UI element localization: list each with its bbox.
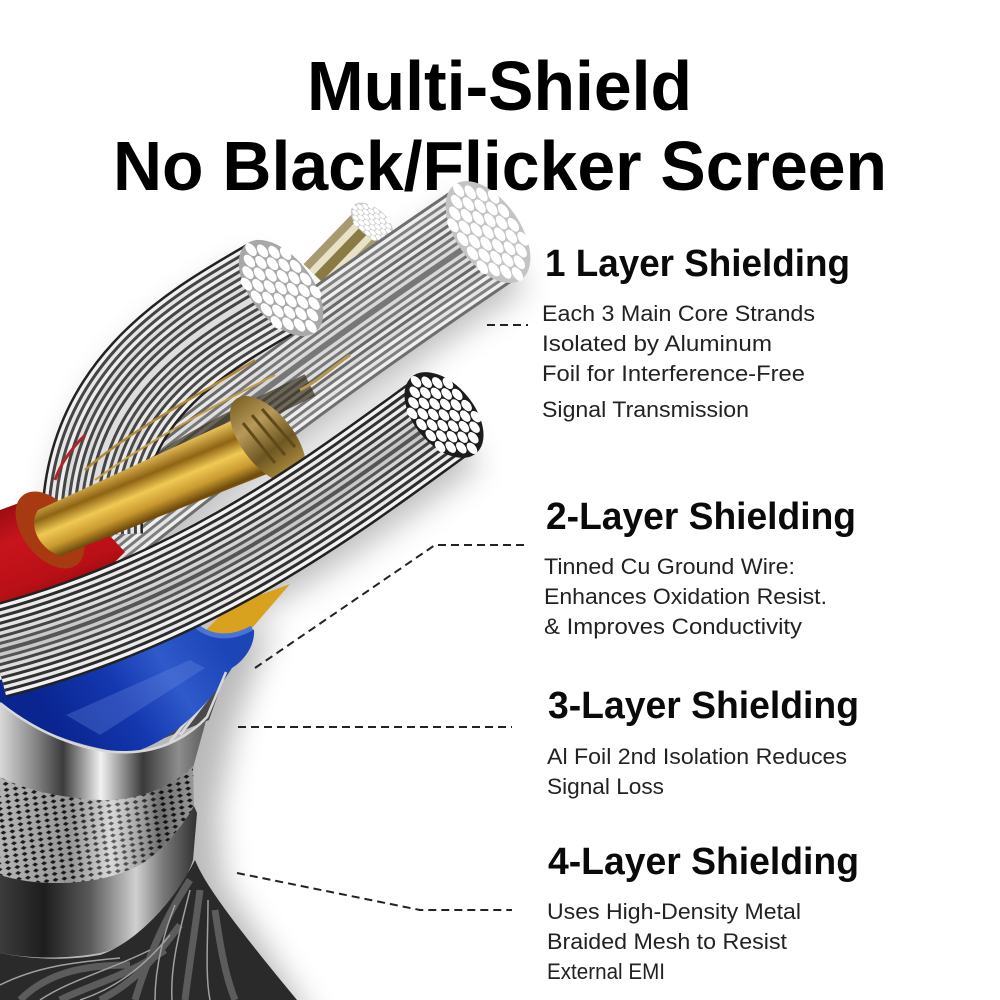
title [113,47,887,205]
section: 1 layer shielding: Isolated by Aluminum [542,331,772,356]
section: 3-layer shielding: Signal Loss [547,774,664,799]
inner strand mass behind bundles [50,330,350,570]
section: 4-layer shielding: Uses High-Density Metal [547,899,801,924]
dark core gap and gold tint strands [55,355,350,490]
blue insulated wire [0,625,254,752]
section: 2-layer shielding [544,496,856,639]
strand end: top right [429,166,547,298]
callout lines [237,325,528,910]
section: 4-layer shielding: External EMI [547,959,665,984]
strand bundle: top right [60,232,488,550]
section: 1 layer shielding [542,243,850,422]
soft drop shadow [3,244,496,1000]
section: 4-layer shielding: 4-Layer Shielding [548,841,859,883]
section: 4-layer shielding [547,841,859,984]
section: 2-layer shielding: Enhances Oxidation Resist. [544,584,827,609]
inner foil behind blue wire [100,650,226,752]
strand bundle: lower [0,415,444,652]
section: 4-layer shielding: Braided Mesh to Resist [547,929,787,954]
second metal sleeve [0,806,197,958]
section: 1 layer shielding: 1 Layer Shielding [545,243,850,285]
section: 2-layer shielding: Tinned Cu Ground Wire: [544,554,795,579]
red insulated wire [0,479,125,622]
foil rim highlight [0,672,226,752]
outer black braid [0,860,297,1000]
strand end: top left [222,225,340,351]
small back strand [318,195,400,278]
title: Multi-Shield [307,47,692,125]
lower gold conductor [196,584,290,642]
title: No Black/Flicker Screen [113,127,887,205]
section: 2-layer shielding: 2-Layer Shielding [546,496,856,538]
section: 1 layer shielding: Each 3 Main Core Strands [542,301,815,326]
metal foil layer tube [0,703,207,800]
cable illustration [0,166,547,1000]
section: 2-layer shielding: & Improves Conductivity [544,614,802,639]
braided mesh layer [0,766,194,883]
strand bundle: top left [92,288,272,535]
gold conductor [34,383,321,556]
section: 3-layer shielding: Al Foil 2nd Isolation Reduces [547,744,847,769]
section: 1 layer shielding: Signal Transmission [542,397,749,422]
section: 1 layer shielding: Foil for Interference-Free [542,361,805,386]
section: 3-layer shielding: 3-Layer Shielding [548,685,859,727]
section: 3-layer shielding [547,685,859,799]
strand end: lower [389,357,499,473]
